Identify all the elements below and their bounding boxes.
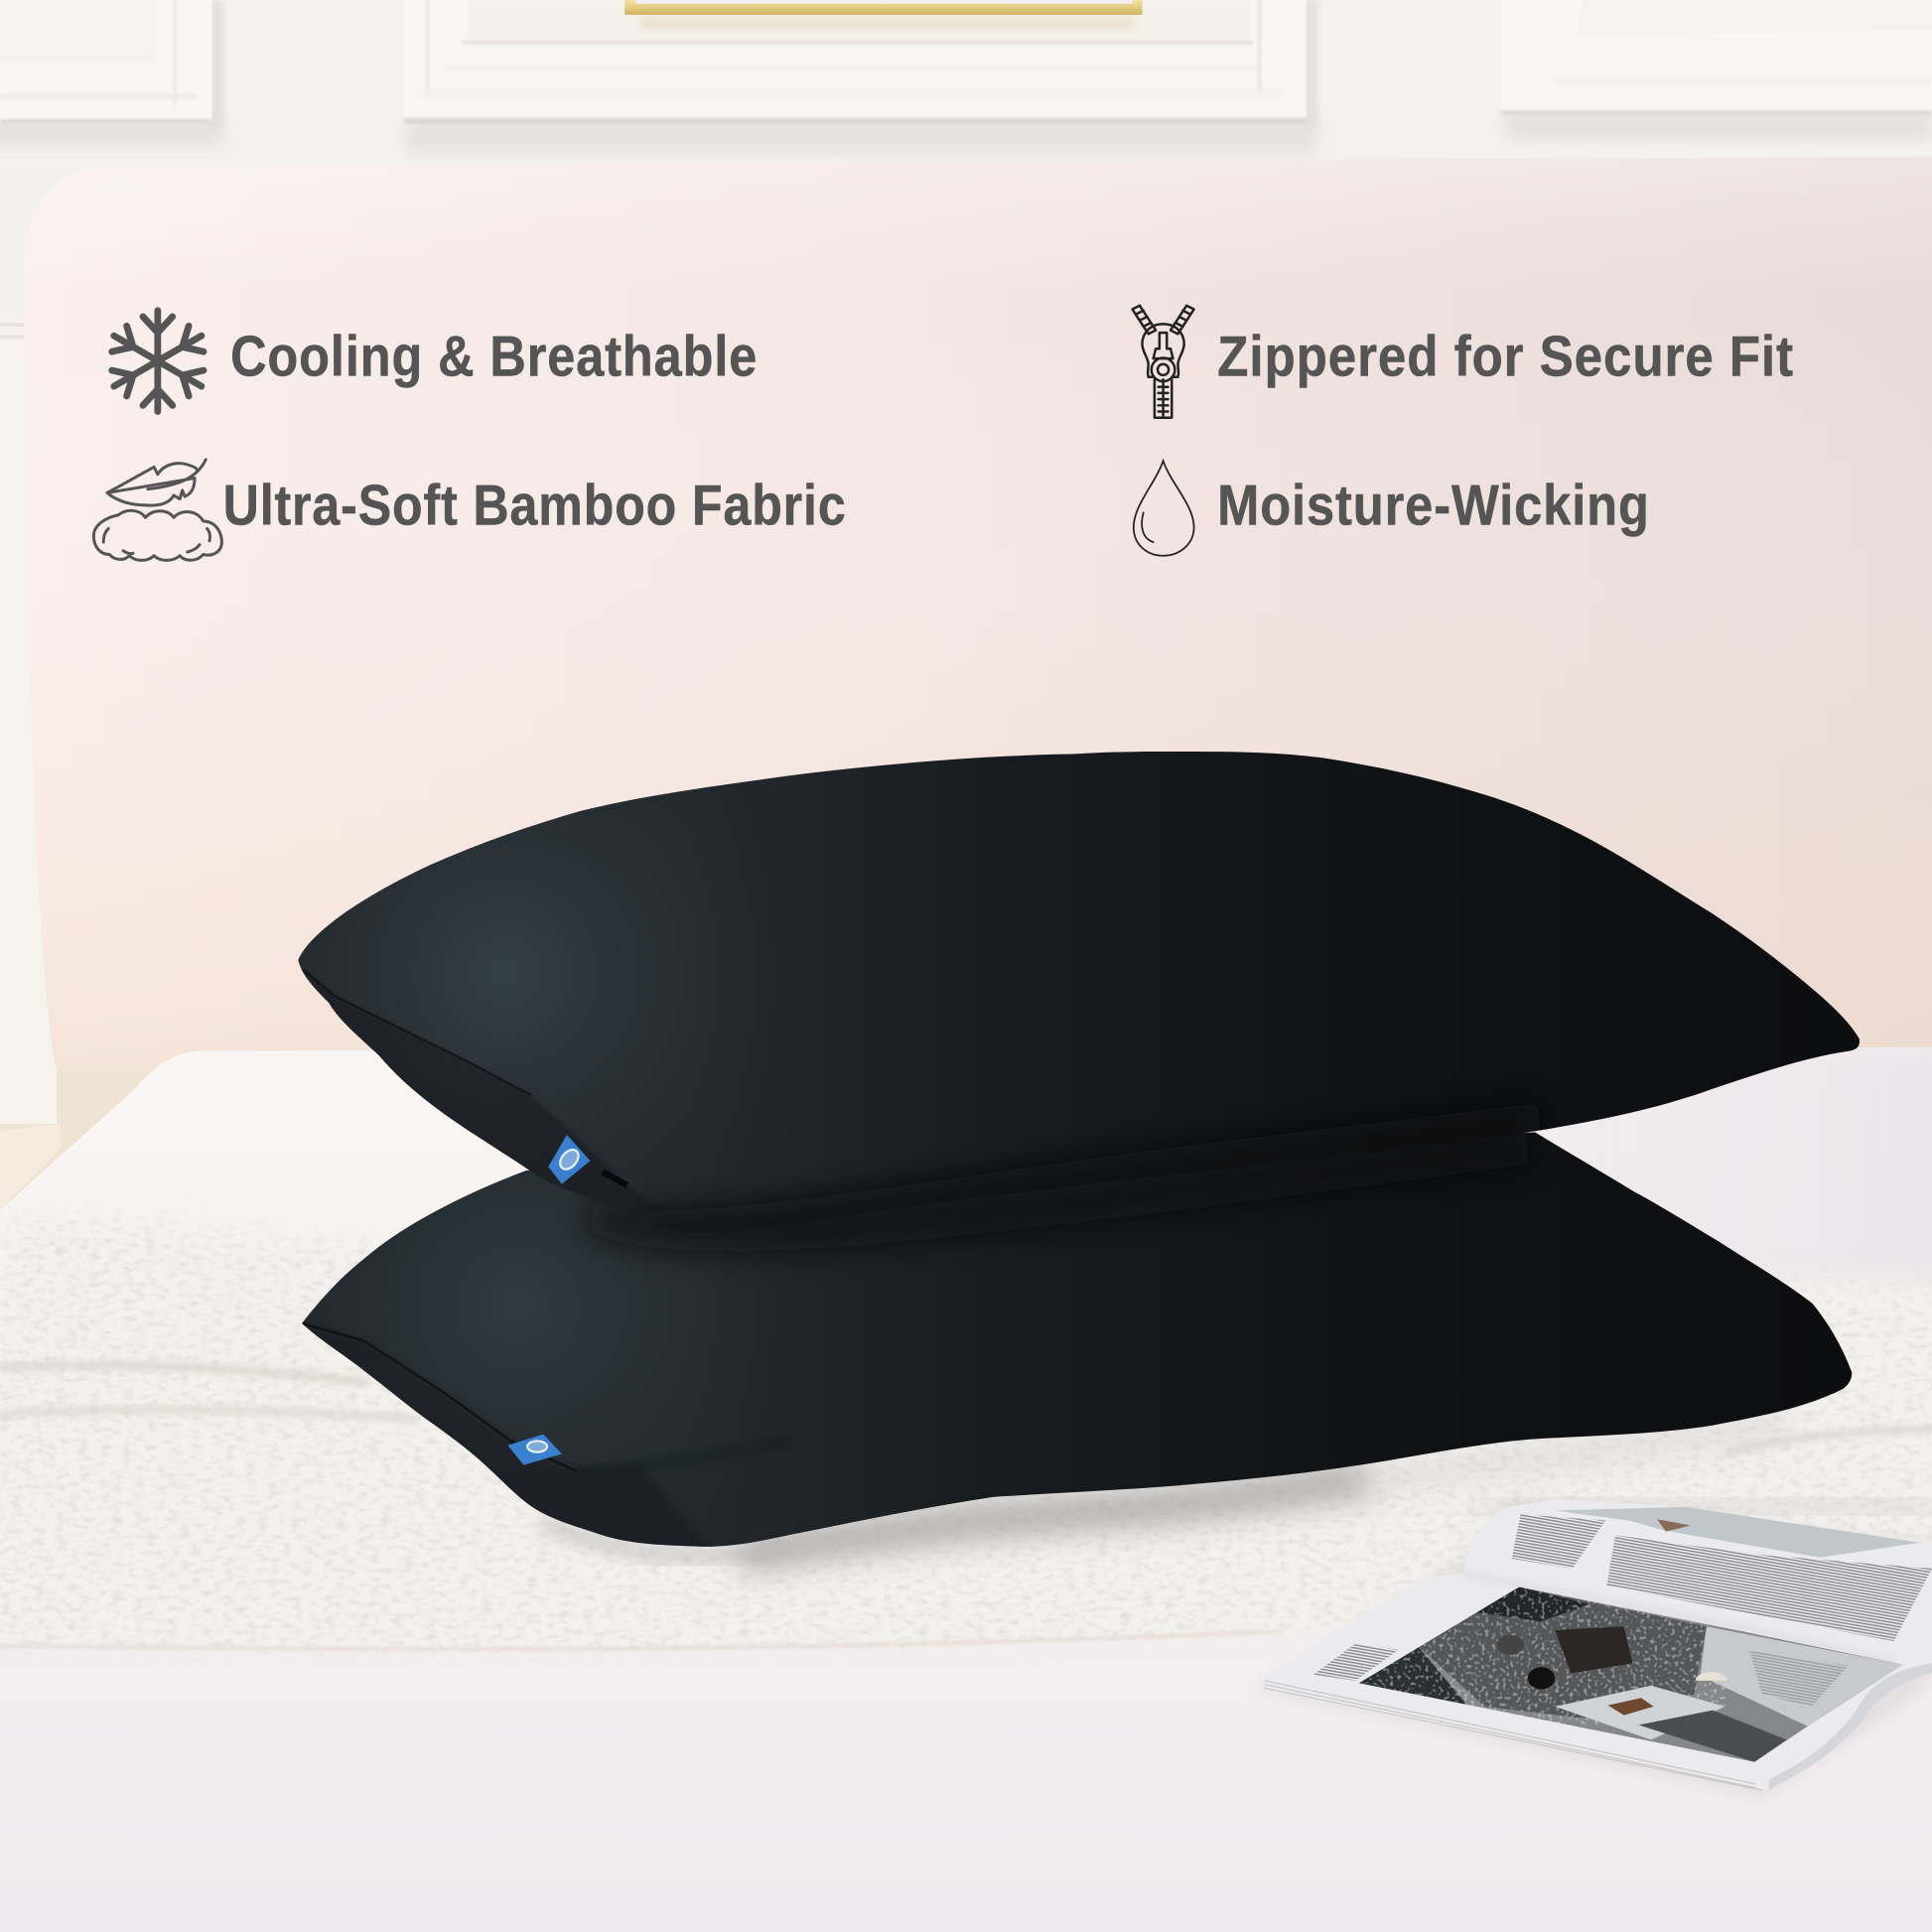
magazine shadow — [1257, 1501, 1932, 1796]
side column — [0, 318, 57, 1124]
label: zipper: Zippered for Secure Fit — [1217, 326, 1794, 389]
wall — [0, 0, 1932, 1109]
brand tag: bottom pillow — [507, 1435, 562, 1465]
bed — [0, 1046, 1932, 1273]
brand tag: top pillow — [548, 1135, 590, 1184]
knit throw blanket — [0, 1213, 1932, 1654]
magazine pages — [1264, 1499, 1932, 1790]
wall moulding panels — [0, 0, 1932, 153]
magazine photo — [1359, 1587, 1902, 1762]
lower hem — [306, 1326, 709, 1547]
magazine — [1257, 1499, 1932, 1796]
feature: cooling — [106, 311, 758, 412]
gutter shading — [1463, 1574, 1897, 1663]
top pillow — [298, 752, 1860, 1231]
blanket bottom edge — [0, 1631, 1282, 1649]
nightstand base — [0, 1069, 216, 1223]
feature: moisture wicking — [1134, 461, 1650, 556]
blanket shadow under pillow — [740, 1478, 1368, 1555]
lower hem — [311, 978, 643, 1213]
icon: feather over cloud — [93, 460, 221, 560]
underside shade — [640, 1124, 1540, 1232]
right panel — [1501, 0, 1932, 140]
headboard — [24, 157, 1932, 1072]
label: moisture wicking: Moisture-Wicking — [1217, 475, 1650, 538]
feature: zipper — [1133, 306, 1794, 418]
magazine upper photo — [1555, 1507, 1920, 1558]
icon: snowflake — [106, 311, 208, 412]
picture frame — [624, 0, 1142, 29]
center panel — [404, 0, 1318, 153]
magazine text columns — [1313, 1514, 1932, 1681]
icon: water drop — [1134, 461, 1194, 556]
icon: zipper — [1133, 306, 1194, 418]
label: bamboo fabric: Ultra-Soft Bamboo Fabric — [223, 475, 847, 538]
feature: bamboo fabric — [93, 460, 847, 560]
left panel — [0, 0, 224, 145]
label: cooling: Cooling & Breathable — [230, 326, 758, 389]
page edge stripes — [1264, 1681, 1762, 1790]
bottom pillow — [302, 1132, 1853, 1547]
shadow cast by top pillow — [592, 1146, 1528, 1233]
